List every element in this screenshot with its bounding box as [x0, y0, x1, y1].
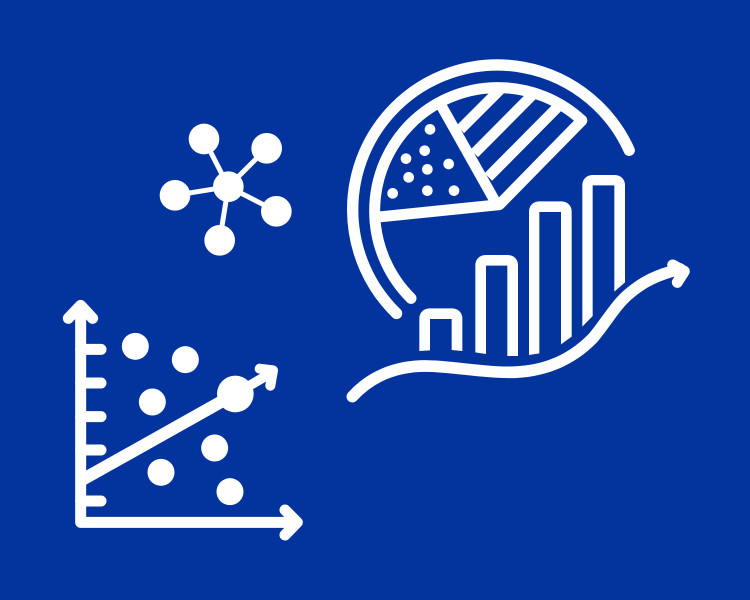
x axis arrow	[285, 510, 297, 535]
scatter dots	[122, 333, 243, 505]
y axis arrow	[68, 305, 93, 318]
growth arrow	[352, 265, 684, 397]
pie dots	[387, 124, 459, 199]
icon: network nodes	[160, 124, 292, 256]
outer arc	[353, 65, 629, 313]
icon: pie chart with bars and growth arrow	[352, 65, 684, 397]
axes	[81, 306, 296, 522]
trend line	[81, 369, 273, 481]
pie chart	[375, 88, 582, 298]
icon: scatter plot with trend line	[68, 305, 297, 535]
bar chart	[419, 175, 625, 356]
axis ticks	[81, 349, 101, 501]
